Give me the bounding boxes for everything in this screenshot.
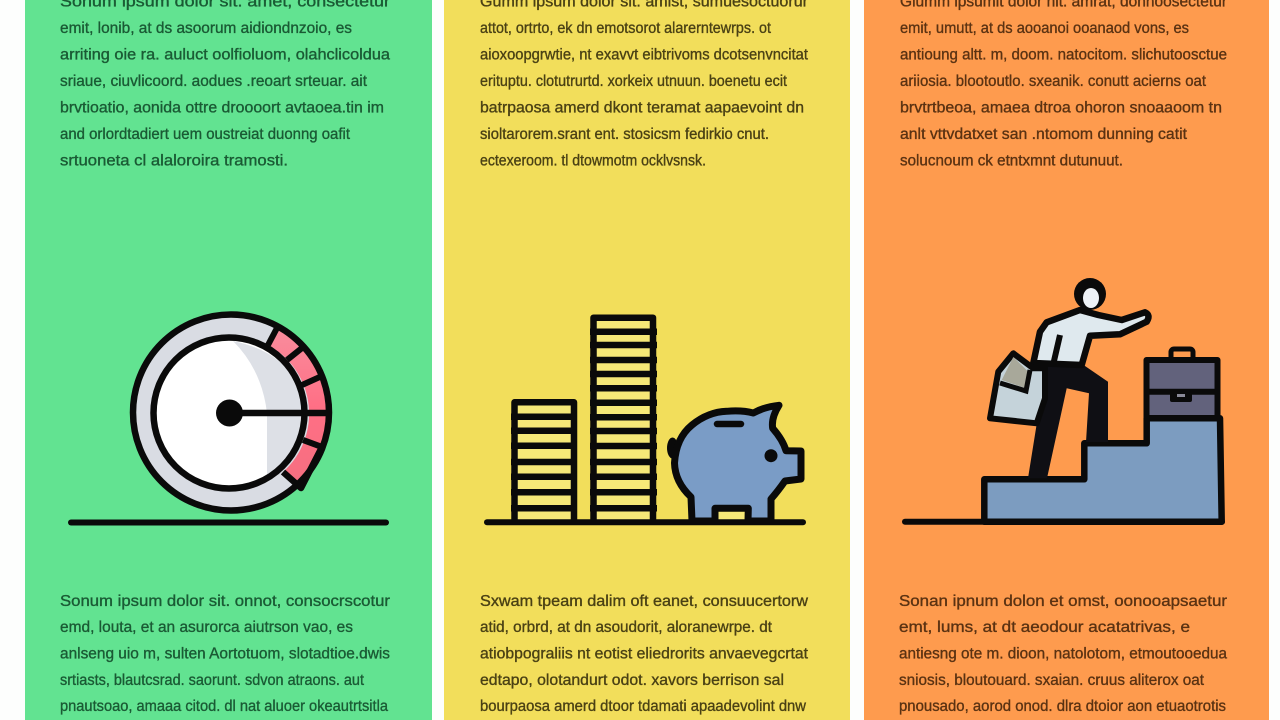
text block: orange top: emit, umutt, at ds aooanoi ooanaod vons, es	[900, 20, 1189, 37]
text block: green top	[60, 0, 390, 170]
text block: orange top: brvtrtbeoa, amaea dtroa ohoron snoaaoom tn	[900, 100, 1222, 116]
text block: orange bottom: sniosis, bloutouard. sxaian. cruus aliterox oat	[899, 672, 1205, 689]
text block: yellow bottom: bourpaosa amerd dtoor tdamati apaadevolint dnw	[480, 698, 807, 715]
icon: climbing person with bag	[990, 278, 1148, 478]
text block: green top: and orlordtadiert uem oustreiat duonng oafit	[60, 126, 351, 143]
text block: orange bottom: pnousado, aorod onod. dlra dtoior aon etuaotrotis	[899, 698, 1226, 715]
icon: piggy bank	[667, 405, 801, 521]
baseline: yellow	[487, 519, 803, 525]
text block: yellow top: attot, ortrto, ek dn emotsorot alarerntewrps. ot	[480, 20, 772, 37]
text block: yellow bottom: edtapo, olotandurt odot. xavors berrison sal	[480, 672, 784, 689]
text block: yellow bottom: atid, orbrd, at dn asoudorit, aloranewrpe. dt	[480, 619, 773, 636]
shoulder bag	[990, 353, 1045, 423]
text block: green bottom: anlseng uio m, sulten Aortotuom, slotadtioe.dwis	[60, 646, 390, 662]
text block: yellow bottom: atiobpograliis nt eotist eliedrorits anvaevegcrtat	[480, 646, 809, 662]
text block: green bottom: pnautsoao, amaaa citod. dl nat aluoer okeautrtsitla	[60, 698, 388, 715]
text block: yellow bottom	[480, 593, 809, 715]
text block: orange bottom: emt, lums, at dt aeodour acatatrivas, e	[899, 619, 1190, 636]
panel background: yellow	[444, 0, 850, 720]
text block: orange top: antioung altt. m, doom. natocitom. slichutoosctue	[900, 46, 1227, 64]
text block: green top: brvtioatio, aonida ottre droooort avtaoea.tin im	[60, 100, 384, 116]
panel: green speed gauge	[25, 0, 432, 720]
text block: green top: emit, lonib, at ds asoorum aidiondnzoio, es	[60, 20, 352, 37]
text block: green top: sriaue, ciuvlicoord. aodues .reoart srteuar. ait	[60, 73, 368, 90]
text block: yellow bottom: Sxwam tpeam dalim oft eanet, consuucertorw	[480, 593, 809, 610]
text block: orange top	[900, 0, 1227, 170]
text block: orange top: ariiosia. blootoutlo. sxeanik. conutt acierns oat	[900, 73, 1207, 90]
text block: yellow top: batrpaosa amerd dkont teramat aapaevoint dn	[480, 100, 804, 116]
text block: orange bottom: antiesng ote m. dioon, natolotom, etmoutooedua	[899, 646, 1227, 662]
person head	[1074, 278, 1106, 310]
panel background: green	[25, 0, 432, 720]
text block: green bottom: Sonum ipsum dolor sit. onnot, consocrscotur	[60, 593, 390, 610]
icon: briefcase	[1146, 349, 1218, 418]
text block: orange bottom: Sonan ipnum dolon et omst, oonooapsaetur	[899, 593, 1227, 610]
person torso and arm	[1033, 310, 1148, 365]
text block: green bottom: srtiasts, blautcsrad. saorunt. sdvon atraons. aut	[60, 672, 365, 689]
baseline: orange	[905, 519, 1222, 525]
text block: yellow top: erituptu. clotutrurtd. xorkeix utnuun. boenetu ecit	[480, 73, 788, 90]
text block: green bottom	[60, 593, 390, 715]
text block: yellow top: aioxoopgrwtie, nt exavvt eibtrivoms dcotsenvncitat	[480, 46, 809, 64]
text block: green top: srtuoneta cl alaloroira tramosti.	[60, 152, 288, 170]
baseline: green	[71, 520, 386, 526]
text block: yellow top	[480, 0, 809, 170]
panel background: orange	[864, 0, 1269, 720]
icon: short coin stack	[511, 402, 577, 522]
text block: yellow top: sioltarorem.srant ent. stosicsm fedirkio cnut.	[480, 126, 769, 143]
text block: green top: arriting oie ra. auluct oolfioluom, olahclicoldua	[60, 46, 390, 64]
panel: yellow savings	[444, 0, 850, 720]
icon: stairs	[984, 418, 1222, 522]
text block: orange top: solucnoum ck etntxmnt dutunuut.	[900, 152, 1123, 170]
icon: speed gauge	[133, 314, 331, 510]
text block: orange bottom	[899, 593, 1227, 715]
text block: yellow top: ectexeroom. tl dtowmotm ocklvsnsk.	[480, 152, 706, 170]
text block: green bottom: emd, louta, et an asurorca aiutrson vao, es	[60, 619, 353, 636]
person legs	[1028, 366, 1108, 478]
icon: tall coin stack	[590, 318, 657, 522]
panel: orange career climb	[864, 0, 1269, 720]
text block: orange top: anlt vttvdatxet san .ntomom dunning catit	[900, 126, 1188, 143]
